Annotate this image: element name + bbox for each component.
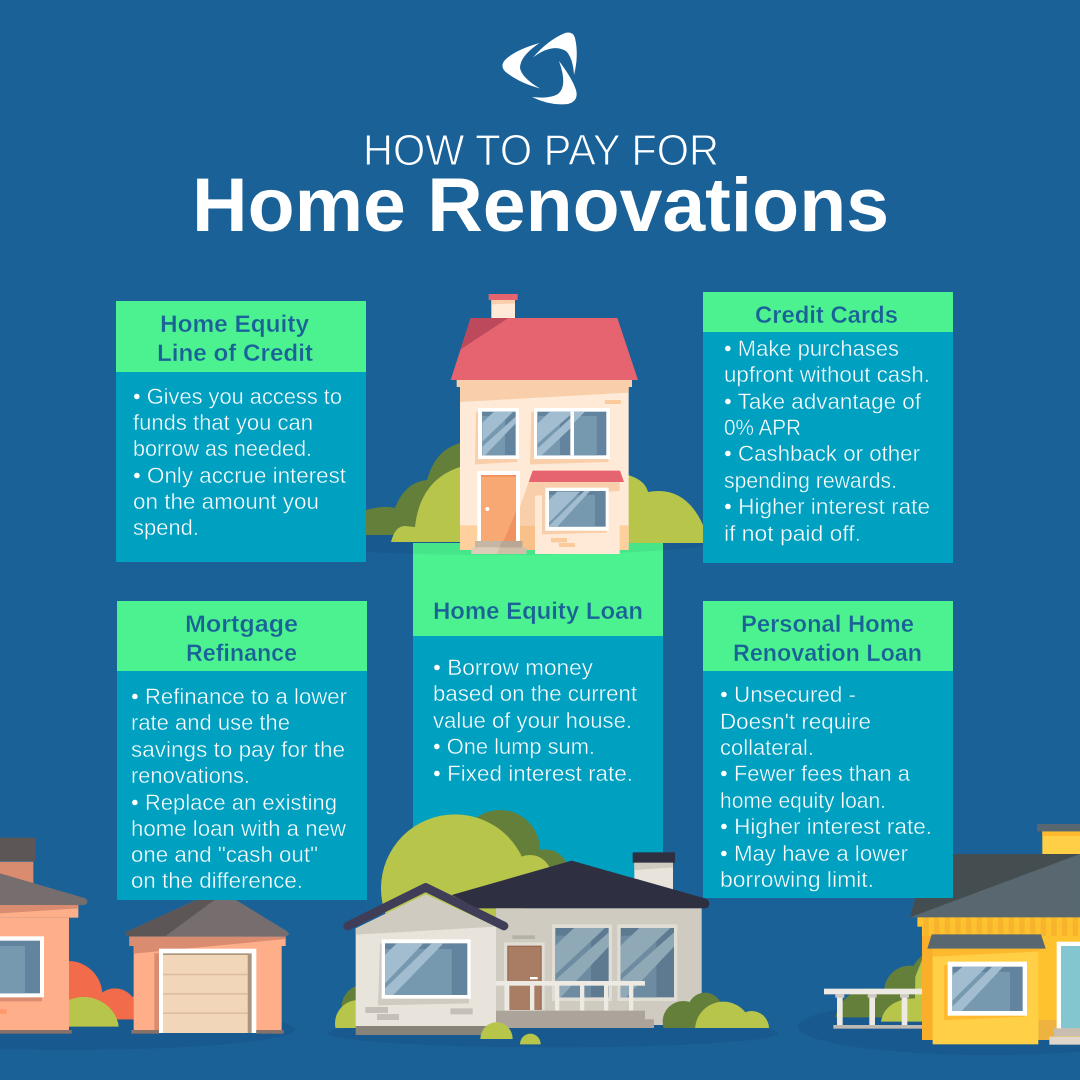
porch railing (496, 981, 645, 1011)
panel: home equity line of credit (116, 301, 366, 562)
panel: home equity line of credit: Line of Credit (157, 340, 313, 367)
chimney (633, 852, 675, 892)
panel: credit cards: spending rewards. (724, 468, 897, 493)
left small bushes (335, 986, 356, 1028)
left house (0, 838, 87, 1034)
panel: personal home renovation loan: Renovation Loan (733, 640, 922, 667)
panel: personal home renovation loan: • May have a lower (720, 841, 908, 866)
ground shadow (328, 1019, 778, 1047)
panel: home equity line of credit: Home Equity (160, 311, 310, 338)
panel: credit cards: upfront without cash. (724, 362, 930, 387)
panel: credit cards: if not paid off. (724, 521, 861, 546)
upper left window (475, 408, 519, 464)
illustration: left house and garage (0, 838, 295, 1050)
panel: home equity loan (413, 543, 663, 878)
orange and lime bushes (69, 961, 134, 1027)
panel: personal home renovation loan: • Unsecured - (720, 682, 856, 707)
door handle (530, 977, 538, 979)
panel: home equity loan: value of your house. (433, 708, 632, 733)
front steps (471, 541, 526, 554)
ground shadow: top house (278, 525, 722, 555)
garage (125, 898, 289, 1034)
panel: home equity line of credit: • Only accrue interest (133, 463, 347, 488)
panel: credit cards: • Higher interest rate (724, 494, 930, 519)
porch railing (824, 989, 922, 1029)
panel: mortgage refinance: Mortgage (185, 611, 298, 638)
upper right window (530, 408, 610, 464)
vent (512, 935, 535, 939)
panel: home equity loan: • Fixed interest rate. (433, 761, 633, 786)
panel: personal home renovation loan: collateral. (720, 735, 814, 760)
roof (910, 854, 1080, 917)
bushes behind top house (366, 443, 703, 543)
panel: home equity line of credit: • Gives you access to (133, 384, 342, 409)
panel: personal home renovation loan: Doesn't require (720, 709, 871, 734)
panel: home equity line of credit: on the amount you (133, 489, 319, 514)
panel: mortgage refinance: Refinance (186, 640, 297, 667)
panel: home equity line of credit: spend. (133, 515, 199, 540)
panel: mortgage refinance: on the difference. (131, 868, 303, 893)
panel: mortgage refinance: • Refinance to a lower (131, 684, 347, 709)
front door and steps (1049, 942, 1080, 1045)
panel: credit cards: • Make purchases (724, 336, 899, 361)
walls (917, 917, 1080, 1040)
panel: home equity loan: Home Equity Loan (433, 598, 643, 625)
panel: personal home renovation loan: • Higher interest rate. (720, 814, 932, 839)
porch steps (496, 1011, 654, 1028)
panel: home equity line of credit: funds that you can (133, 410, 313, 435)
panel: home equity loan: based on the current (433, 681, 638, 706)
chimney (489, 294, 518, 318)
chimney (1037, 824, 1080, 854)
panel: home equity loan: • Borrow money (433, 655, 594, 680)
panel: home equity line of credit: borrow as needed. (133, 436, 312, 461)
panel: personal home renovation loan (703, 601, 953, 898)
bushes (836, 956, 922, 1022)
large windows (552, 924, 677, 1001)
door (477, 471, 520, 542)
front small bushes (480, 1022, 541, 1044)
panel: credit cards: Credit Cards (755, 302, 898, 329)
title: Home Renovations (192, 163, 889, 248)
panel: home equity loan: • One lump sum. (433, 734, 595, 759)
main wall (496, 908, 702, 1025)
illustration: centre bungalow (328, 810, 778, 1058)
panel: credit cards: 0% APR (724, 415, 801, 440)
bay extension with awning and window (520, 471, 624, 554)
door (504, 942, 545, 1011)
panel: personal home renovation loan: • Fewer fees than a (720, 761, 910, 786)
panel: mortgage refinance (117, 601, 367, 900)
right bushes (662, 992, 769, 1028)
house walls (457, 380, 632, 550)
illustration: right yellow house (798, 824, 1080, 1058)
panel: mortgage refinance: home loan with a new (131, 816, 347, 841)
front wing (348, 887, 504, 1035)
trees behind house (381, 810, 569, 962)
illustration: two-storey house (451, 294, 638, 554)
main roof (452, 861, 709, 908)
title (192, 126, 889, 248)
panel: mortgage refinance: rate and use the (131, 710, 290, 735)
panel: credit cards (703, 292, 953, 563)
panel: mortgage refinance: renovations. (131, 763, 250, 788)
panel: personal home renovation loan: borrowing limit. (720, 867, 874, 892)
panel: mortgage refinance: one and "cash out" (131, 842, 318, 867)
panel: mortgage refinance: • Replace an existing (131, 790, 337, 815)
panel: credit cards: • Cashback or other (724, 441, 920, 466)
panel: personal home renovation loan: Personal Home (741, 611, 914, 638)
title: HOW TO PAY FOR (363, 126, 719, 175)
ground shadow (0, 1009, 295, 1050)
logo (502, 33, 577, 104)
ground shadow (798, 998, 1080, 1055)
panel: personal home renovation loan: home equity loan. (720, 788, 886, 813)
bay with window (927, 934, 1046, 1044)
panel: credit cards: • Take advantage of (724, 389, 922, 414)
roof (451, 318, 638, 380)
panel: mortgage refinance: savings to pay for the (131, 737, 345, 762)
